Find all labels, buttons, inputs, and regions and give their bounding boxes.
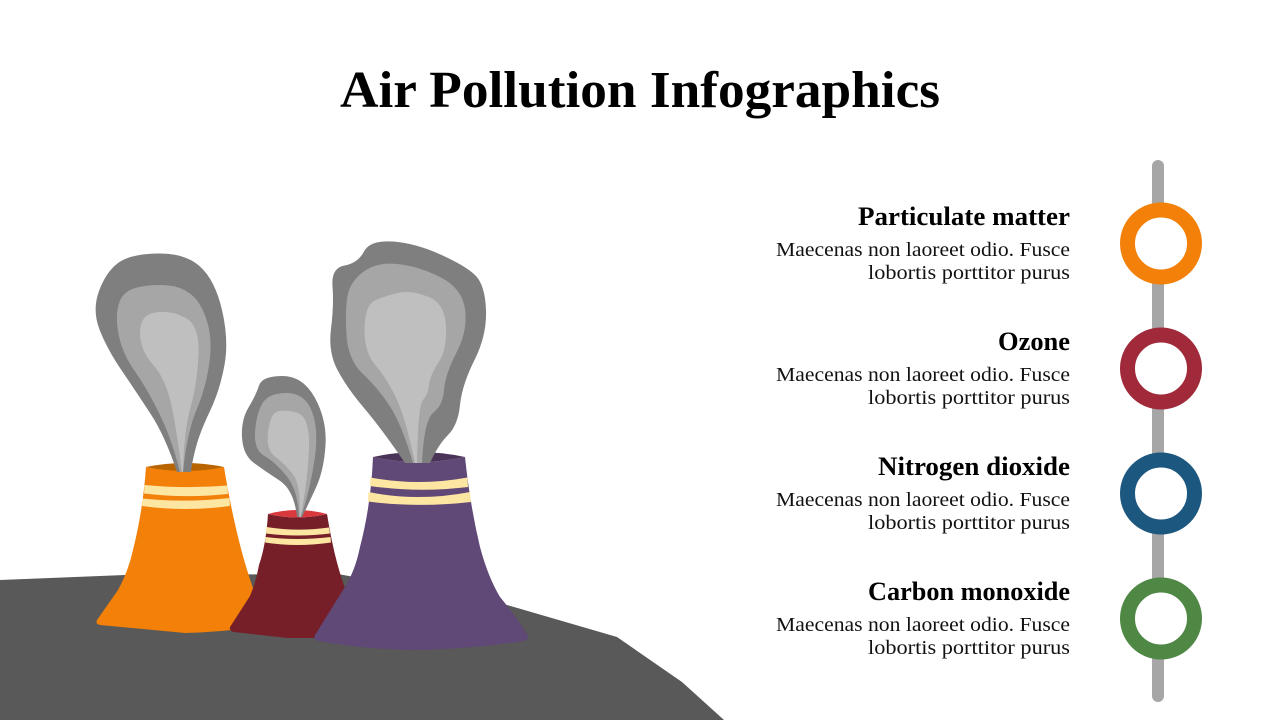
description	[776, 364, 1070, 409]
item: ozone	[776, 327, 1194, 409]
description: Maecenas non laoreet odio. Fusce	[776, 239, 1070, 261]
heading: Carbon monoxide	[868, 577, 1070, 606]
timeline line	[1152, 160, 1164, 702]
item: carbon monoxide	[776, 577, 1194, 659]
chimney body	[96, 467, 273, 633]
ring marker	[1128, 335, 1194, 402]
description: lobortis porttitor purus	[868, 637, 1070, 659]
chimney stripes	[142, 485, 230, 509]
description: Maecenas non laoreet odio. Fusce	[776, 364, 1070, 386]
ring marker	[1128, 460, 1194, 527]
item: particulate matter	[776, 202, 1194, 284]
smoke plume	[96, 253, 226, 472]
description: lobortis porttitor purus	[868, 262, 1070, 284]
title: Air Pollution Infographics	[340, 62, 940, 119]
item: nitrogen dioxide	[776, 452, 1194, 534]
heading: Particulate matter	[858, 202, 1070, 231]
chimney stripes	[368, 478, 471, 505]
illustration: purple chimney	[314, 241, 528, 650]
description	[776, 614, 1070, 659]
chimney body	[230, 514, 350, 638]
description: Maecenas non laoreet odio. Fusce	[776, 489, 1070, 511]
illustration: orange chimney	[96, 253, 273, 633]
illustration: maroon chimney	[230, 376, 350, 638]
heading: Ozone	[998, 327, 1070, 356]
chimney mouth	[146, 463, 224, 471]
description: lobortis porttitor purus	[868, 387, 1070, 409]
heading: Nitrogen dioxide	[878, 452, 1070, 481]
description	[776, 489, 1070, 534]
description: Maecenas non laoreet odio. Fusce	[776, 614, 1070, 636]
chimney mouth	[268, 510, 327, 518]
chimney body	[314, 457, 528, 650]
description	[776, 239, 1070, 284]
chimney stripes	[265, 527, 331, 545]
smoke plume	[330, 241, 486, 463]
ground	[0, 574, 724, 720]
ring marker	[1128, 210, 1194, 277]
smoke plume	[242, 376, 326, 517]
ring marker	[1128, 585, 1194, 652]
description: lobortis porttitor purus	[868, 512, 1070, 534]
chimney mouth	[373, 452, 465, 462]
